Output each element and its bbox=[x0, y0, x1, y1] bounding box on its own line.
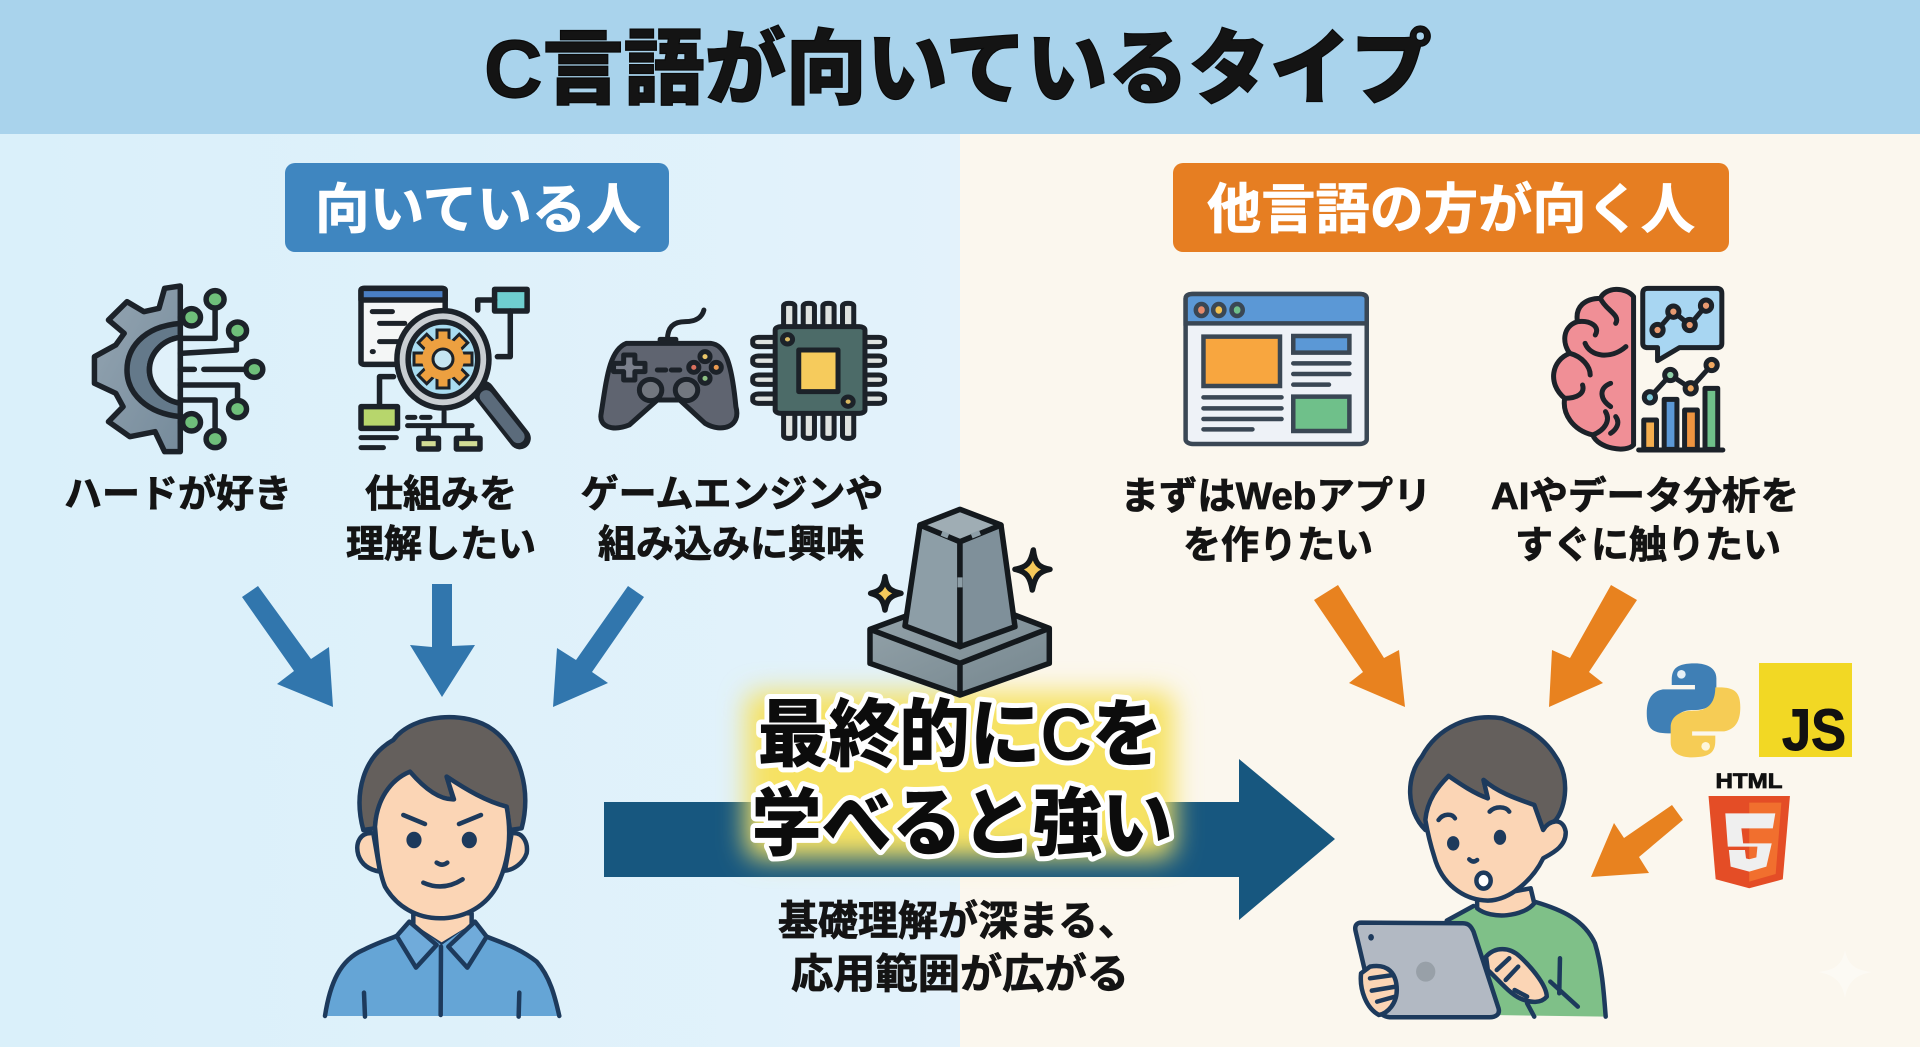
arrow: orange right bbox=[1549, 585, 1637, 707]
label: embedded: 組み込みに興味 bbox=[598, 524, 864, 566]
arrow: blue right bbox=[553, 586, 644, 707]
icon: game controller bbox=[601, 310, 737, 428]
icon: gear with circuit bbox=[94, 286, 263, 452]
panel: left background bbox=[0, 134, 960, 1047]
person: right curious man with tablet bbox=[1355, 717, 1606, 1017]
label: understand: 理解したい bbox=[346, 524, 536, 566]
icon: javascript logo: JS bbox=[1782, 698, 1846, 763]
slogan: learn C eventually bbox=[752, 693, 1172, 865]
badge: suited people: 向いている人 bbox=[315, 180, 641, 240]
label: AI line 2: すぐに触りたい bbox=[1515, 525, 1781, 567]
slogan: learn C eventually: 最終的にCを bbox=[758, 693, 1162, 776]
label: hardware: ハードが好き bbox=[64, 474, 292, 516]
label: game engine: ゲームエンジンや bbox=[581, 474, 883, 516]
caption: benefit: 応用範囲が広がる bbox=[791, 951, 1129, 997]
icon: javascript logo bbox=[1759, 663, 1852, 763]
arrow: blue left bbox=[242, 586, 333, 707]
icon: microchip bbox=[753, 303, 885, 438]
badge: suited people bbox=[285, 163, 669, 252]
badge: other languages: 他言語の方が向く人 bbox=[1207, 180, 1695, 240]
label: mechanism: 仕組みを bbox=[365, 474, 517, 516]
icon: html5 logo bbox=[1709, 770, 1790, 888]
arrow: main transition arrow bbox=[604, 759, 1335, 920]
icon: python logo bbox=[1647, 663, 1740, 757]
caption: benefit bbox=[778, 898, 1138, 997]
label: web app line 2: を作りたい bbox=[1183, 525, 1373, 567]
label: web app line 1: まずはWebアプリ bbox=[1120, 476, 1432, 518]
icon: html5 logo: HTML bbox=[1716, 770, 1783, 793]
highlight glow behind slogan bbox=[746, 692, 1174, 858]
arrow: orange left bbox=[1314, 585, 1405, 707]
icon: web browser bbox=[1186, 294, 1367, 444]
arrow: orange from logos bbox=[1591, 805, 1683, 877]
person: left determined man bbox=[325, 717, 559, 1017]
arrow: blue center bbox=[410, 584, 475, 697]
title band bbox=[0, 0, 1920, 134]
icon: brain and data charts bbox=[1554, 288, 1723, 450]
badge: other languages bbox=[1173, 163, 1729, 252]
slogan: learn C eventually: 学べると強い bbox=[752, 782, 1172, 865]
caption: benefit: 基礎理解が深まる、 bbox=[778, 898, 1138, 944]
label: AI line 1: AIやデータ分析を bbox=[1491, 475, 1799, 518]
watermark sparkle bbox=[1818, 950, 1872, 998]
panel: right background bbox=[960, 134, 1920, 1047]
icon: stone foundation monument bbox=[870, 509, 1050, 695]
icon: magnifier over system diagram bbox=[361, 288, 527, 449]
title: C言語が向いているタイプ bbox=[484, 24, 1432, 115]
